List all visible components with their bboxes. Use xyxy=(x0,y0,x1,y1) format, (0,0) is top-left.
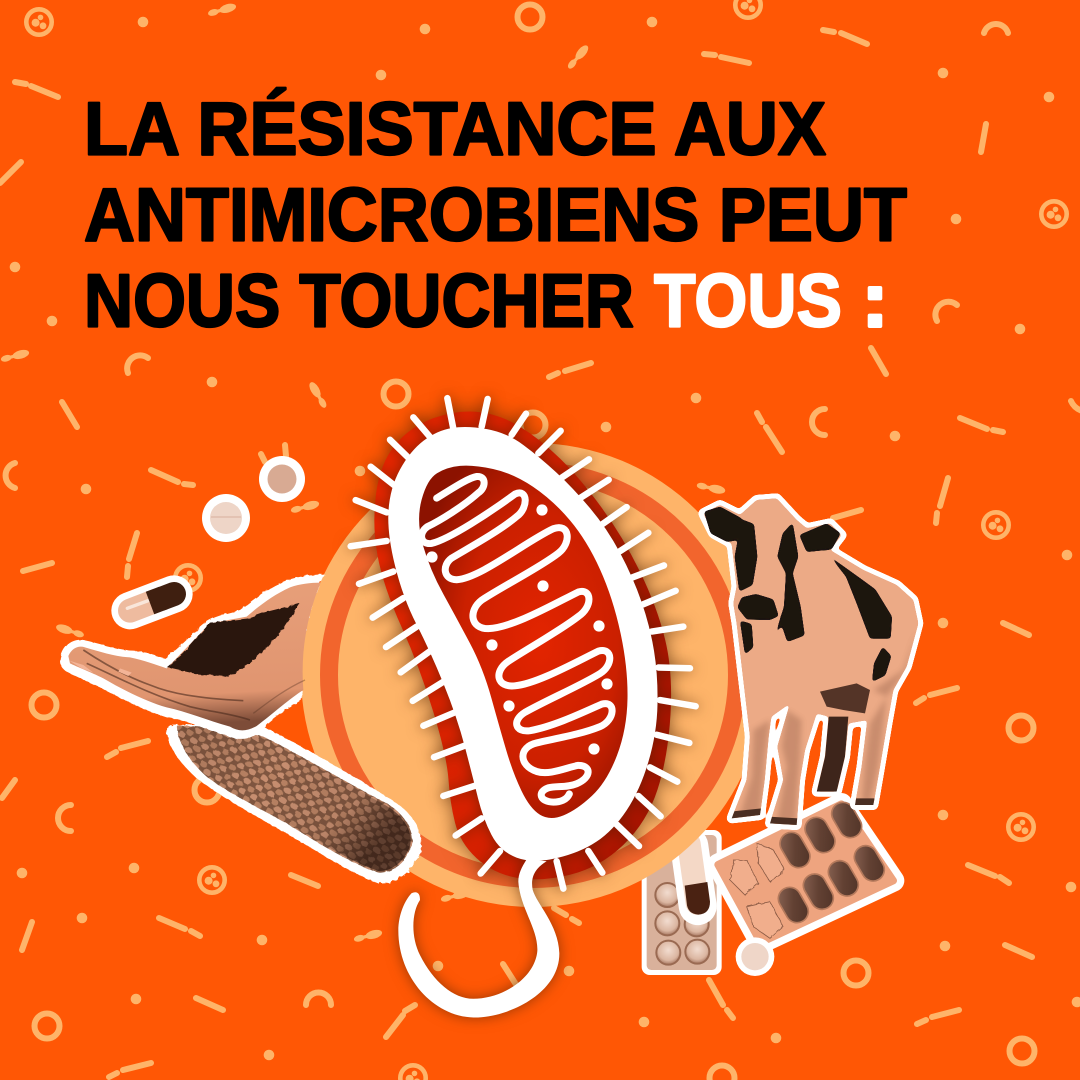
corn cob xyxy=(167,724,421,883)
bacterium inner squiggle xyxy=(422,476,612,802)
bacterium xyxy=(351,398,696,1018)
title: LA RÉSISTANCE AUX xyxy=(84,86,826,170)
title: TOUS xyxy=(654,258,842,342)
large blister pack with tablet xyxy=(718,798,893,976)
title: ANTIMICROBIENS PEUT xyxy=(84,172,907,256)
bacterium spikes, tail and white body xyxy=(351,398,696,1018)
bacterium inner cytoplasm xyxy=(419,466,628,818)
peach disc with ring xyxy=(301,443,765,907)
title: NOUS TOUCHER xyxy=(84,258,634,342)
cow xyxy=(703,498,918,827)
hand holding soil xyxy=(60,574,324,739)
bacterium granules xyxy=(426,504,613,755)
small blister pack xyxy=(642,825,722,975)
title: : xyxy=(862,258,887,342)
bacterium outer red membrane xyxy=(374,411,671,879)
title xyxy=(84,86,907,342)
capsule and tablets xyxy=(127,456,305,611)
